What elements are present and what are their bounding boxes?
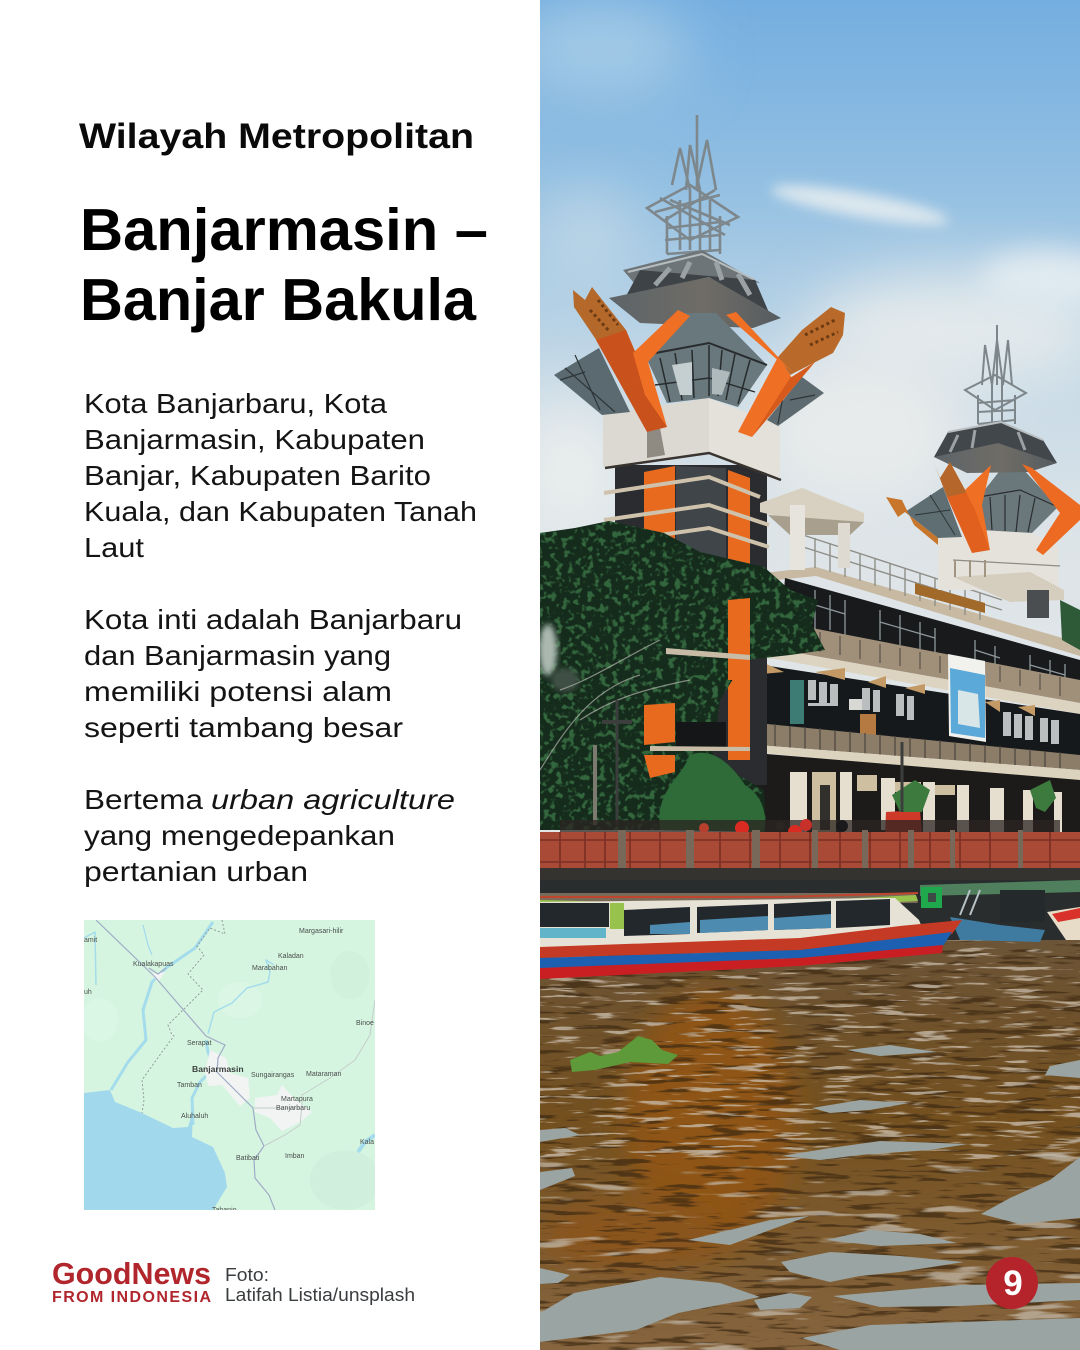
tower shaft [615,465,767,785]
left glass wing [554,348,630,415]
warm reflection [625,990,795,1250]
map of the metropolitan area [82,920,380,1214]
photo: sky with clouds [540,0,1080,832]
boat hull: red keel [540,945,943,979]
building signboard [915,583,985,613]
text block: member regions: Kota Banjarbaru, Kota [84,388,387,419]
photo: river market building [510,0,1080,1350]
banner [948,654,986,742]
AC unit [849,699,862,710]
map: place labels: Martapura [281,1096,313,1103]
map: urban areas [151,972,312,1131]
middle floor windows [808,680,1059,744]
map: place labels: Kala [360,1139,374,1146]
red water tank [885,811,922,832]
photo: main tower [554,115,864,785]
upper roof openings [625,270,770,315]
text block: member regions: Banjarmasin, Kabupaten [84,424,425,455]
title: Banjarmasin – [80,197,488,263]
shaft dark panels [676,466,726,558]
title: Banjar Bakula [80,267,477,333]
boat windows [540,899,890,936]
palm leaves at right edge [1060,600,1080,650]
map: place labels: Tamban [177,1082,202,1089]
green sign on boat [921,887,942,908]
central glass lantern [645,313,767,407]
text block: core cities: dan Banjarmasin yang [84,640,391,671]
upper roof top plate [623,250,760,290]
map: place labels: Serapat [187,1040,212,1047]
text block: member regions: Kuala, dan Kabupaten Tanah [84,496,477,527]
photo: foreground boat [540,893,962,979]
map: place labels: Aluhaluh [181,1113,208,1120]
tree branches [540,640,690,770]
shaft orange panels [644,466,675,539]
text block: theme: urban agriculture [211,784,455,815]
water plant [570,1036,678,1072]
photo: second tower [886,325,1080,618]
title [80,197,488,333]
second tower glass center [979,468,1058,533]
map: place labels: Sungairangas [251,1072,295,1079]
lamp posts [595,700,902,825]
second tower glass left [905,487,962,538]
left orange wing [573,287,690,432]
map: place labels: Batibati [236,1155,260,1162]
second tower roof [934,422,1057,463]
text block: theme: yang mengedepankan [84,820,395,851]
upper roof lower tier [609,277,781,328]
map: place labels: Kaladan [278,953,304,960]
boat cabin [540,898,925,950]
second tower deck [953,572,1064,602]
photo credit: Foto: [225,1265,269,1285]
photo: moored boats behind [540,880,1080,942]
text block: member regions: Banjar, Kabupaten Barito [84,460,431,491]
logo: GoodNews from Indonesia: GoodNews [52,1256,211,1291]
upper floor windows [815,590,1065,684]
middle balcony railing [757,723,1080,770]
photo credit: Latifah Listia/unsplash [225,1285,415,1305]
page number badge: 9 [1003,1264,1023,1303]
middle floor slab [757,745,1080,782]
map: place labels: uh [84,989,92,996]
upper balcony railing [778,628,1080,703]
boat roof [540,893,918,905]
shaft ledges [604,477,769,547]
map: place labels: Kualakapuas [133,961,174,968]
text block: theme: pertanian urban [84,856,308,887]
second tower right orange wing [1022,464,1080,555]
second tower window [1027,590,1049,618]
text block: theme [84,784,455,887]
map: place labels: Banjarmasin [192,1064,244,1074]
map: place labels: Mataraman [306,1071,342,1078]
photo: visitors on the riverfront [560,819,1060,839]
map: place labels: amit [84,937,97,944]
photo: quay wall [540,868,1080,888]
map: place labels: Binoe [356,1020,374,1027]
white tower block [603,398,780,478]
building rooftop railing [803,535,1002,620]
logo: GoodNews from Indonesia [52,1256,211,1306]
right orange wing [726,307,845,437]
map: place labels: Banjarbaru [276,1105,310,1112]
terrace on main tower [760,488,864,570]
text block: theme: Bertema [84,784,203,815]
text block: member regions [84,388,477,563]
map: rivers [84,922,375,1152]
building roof deck [764,567,1080,656]
boat hull: red stripe [540,920,962,958]
map: place labels: Margasari-hilir [299,928,344,935]
right glass wing [767,377,824,426]
map: place labels: Tabanio [212,1207,237,1214]
map: sea [84,1090,227,1210]
map: roads [96,920,275,1210]
photo: building facade [745,535,1080,835]
building upper floor [784,578,1080,680]
logo: GoodNews from Indonesia: FROM INDONESIA [52,1289,211,1306]
middle floor eaves [762,662,1035,716]
second tower block [938,530,1058,590]
upper floor slab [767,654,1080,714]
section label: Wilayah Metropolitan: Wilayah Metropolitan [79,117,474,156]
palm plants [892,780,1056,812]
text block: core cities [84,604,462,743]
boat hull: blue stripe [540,932,952,969]
photo: red riverside fence [540,830,1080,872]
text block: core cities: Kota inti adalah Banjarbaru [84,604,462,635]
map: place labels: Imban [285,1153,305,1160]
map: place labels [84,928,374,1214]
grey sky reflections [540,1045,1080,1350]
text block: member regions: Laut [84,532,144,563]
map: place labels: Marabahan [252,965,288,972]
ripple textures [540,930,1080,1350]
map: district boundary [142,920,225,1113]
photo: tree [539,520,902,835]
page number badge [986,1257,1038,1309]
text block: core cities: seperti tambang besar [84,712,403,743]
photo credit [225,1265,415,1305]
bush [659,753,765,832]
middle floor [767,666,1080,755]
ground floor columns [790,772,1062,832]
gaps in the tree canopy [539,598,750,778]
ground floor [755,753,1080,835]
spire lattice [647,115,738,254]
second spire lattice [965,325,1026,424]
left white panel [0,0,540,1350]
photo: river water [540,930,1080,1350]
text block: core cities: memiliki potensi alam [84,676,392,707]
small red and white boat [1047,907,1080,940]
second tower left orange wing [886,462,991,553]
